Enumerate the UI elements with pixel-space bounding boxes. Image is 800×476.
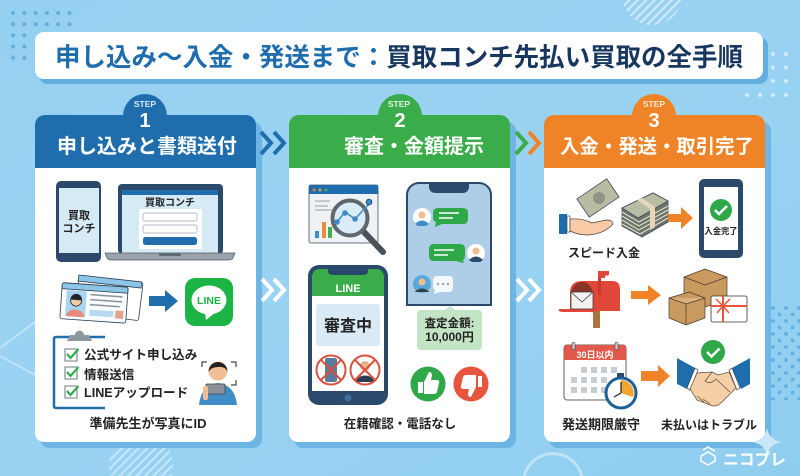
step 3 heading: 入金・発送・取引完了 (560, 136, 754, 158)
step 3 badge: 3 (648, 110, 660, 132)
icon: parcels and gift (669, 269, 747, 325)
step 2 badge (388, 99, 410, 132)
clipboard checklist (54, 330, 198, 408)
icon: calendar with stopwatch: 30日以内 (576, 349, 614, 360)
arrow: cards to LINE (149, 290, 178, 312)
panel: step 1 (35, 94, 262, 448)
icon: chat phone (407, 183, 491, 305)
step 1 caption: 準備先生が写真にID (89, 416, 207, 431)
arrow: calendar to handshake (641, 365, 670, 387)
step 2 badge: STEP (388, 99, 410, 109)
icon: laptop with form: 買取コンチ (145, 197, 195, 209)
clipboard checklist: 情報送信 (84, 367, 135, 382)
step 1 heading: 申し込みと書類送付 (57, 135, 237, 158)
logo (701, 447, 786, 469)
label: ship deadline: 発送期限厳守 (562, 417, 640, 432)
step 1 badge (134, 99, 156, 132)
icon: laptop with form (105, 184, 235, 260)
callout: assessed amount: 10,000円 (425, 330, 474, 344)
panel: step 2 (289, 94, 516, 448)
icon: check mark (701, 340, 725, 364)
icon: smartphone (56, 181, 101, 262)
clipboard checklist: LINEアップロード (84, 386, 188, 400)
icon: ID cards (60, 275, 143, 323)
icon: thumbs down (454, 366, 488, 402)
icon: phone payment complete: 入金完了 (704, 226, 738, 236)
icon: phone under review (308, 265, 388, 405)
sparkle (752, 428, 782, 456)
icon: handshake (677, 358, 750, 406)
arrow: mailbox to parcels (631, 285, 661, 305)
logo: ニコプレ (723, 451, 786, 469)
callout: assessed amount: 査定金額: (425, 316, 474, 330)
icon: LINE app (185, 278, 233, 326)
arrow: step 1 to 2 header chevrons (261, 132, 284, 154)
arrow: money to phone (668, 207, 693, 229)
step 2 caption: 在籍確認・電話なし (344, 416, 456, 431)
title banner (35, 32, 768, 84)
icon: thumbs up (410, 366, 446, 402)
icon: LINE app: LINE (197, 295, 221, 307)
callout: assessed amount (417, 306, 482, 350)
panel: step 3 (544, 94, 771, 448)
step 2 heading: 審査・金額提示 (344, 135, 484, 158)
icon: calendar with stopwatch (564, 342, 636, 408)
arrow: step 1 to 2 lower chevrons (262, 279, 284, 301)
label: non-payment trouble: 未払いはトラブル (661, 417, 757, 432)
icon: phone under review: LINE (335, 283, 361, 295)
icon: money stack (622, 193, 668, 237)
step 1 badge: 1 (139, 110, 151, 132)
label: speed deposit: スピード入金 (568, 245, 640, 260)
arrow: step 2 to 3 lower chevrons (517, 279, 539, 301)
icon: smartphone: コンチ (62, 222, 96, 235)
step 3 badge (643, 99, 665, 132)
icon: person photographing ID (199, 362, 237, 405)
icon: hand receiving money (559, 179, 619, 235)
icon: mailbox (559, 271, 620, 328)
clipboard checklist: 公式サイト申し込み (84, 347, 198, 362)
icon: browser analysis with magnifier (309, 185, 383, 252)
arrow: step 2 to 3 orange chevron (529, 132, 539, 154)
arrow: step 2 to 3 header chevrons (516, 132, 526, 154)
icon: smartphone: 買取 (68, 209, 90, 222)
step 3 badge: STEP (643, 99, 665, 109)
icon: phone payment complete (699, 179, 743, 258)
step 1 badge: STEP (134, 99, 156, 109)
step 2 badge: 2 (394, 110, 406, 132)
icon: phone under review: 審査中 (324, 317, 372, 335)
title text: 申し込み〜入金・発送まで：買取コンチ先払い買取の全手順 (55, 44, 743, 72)
